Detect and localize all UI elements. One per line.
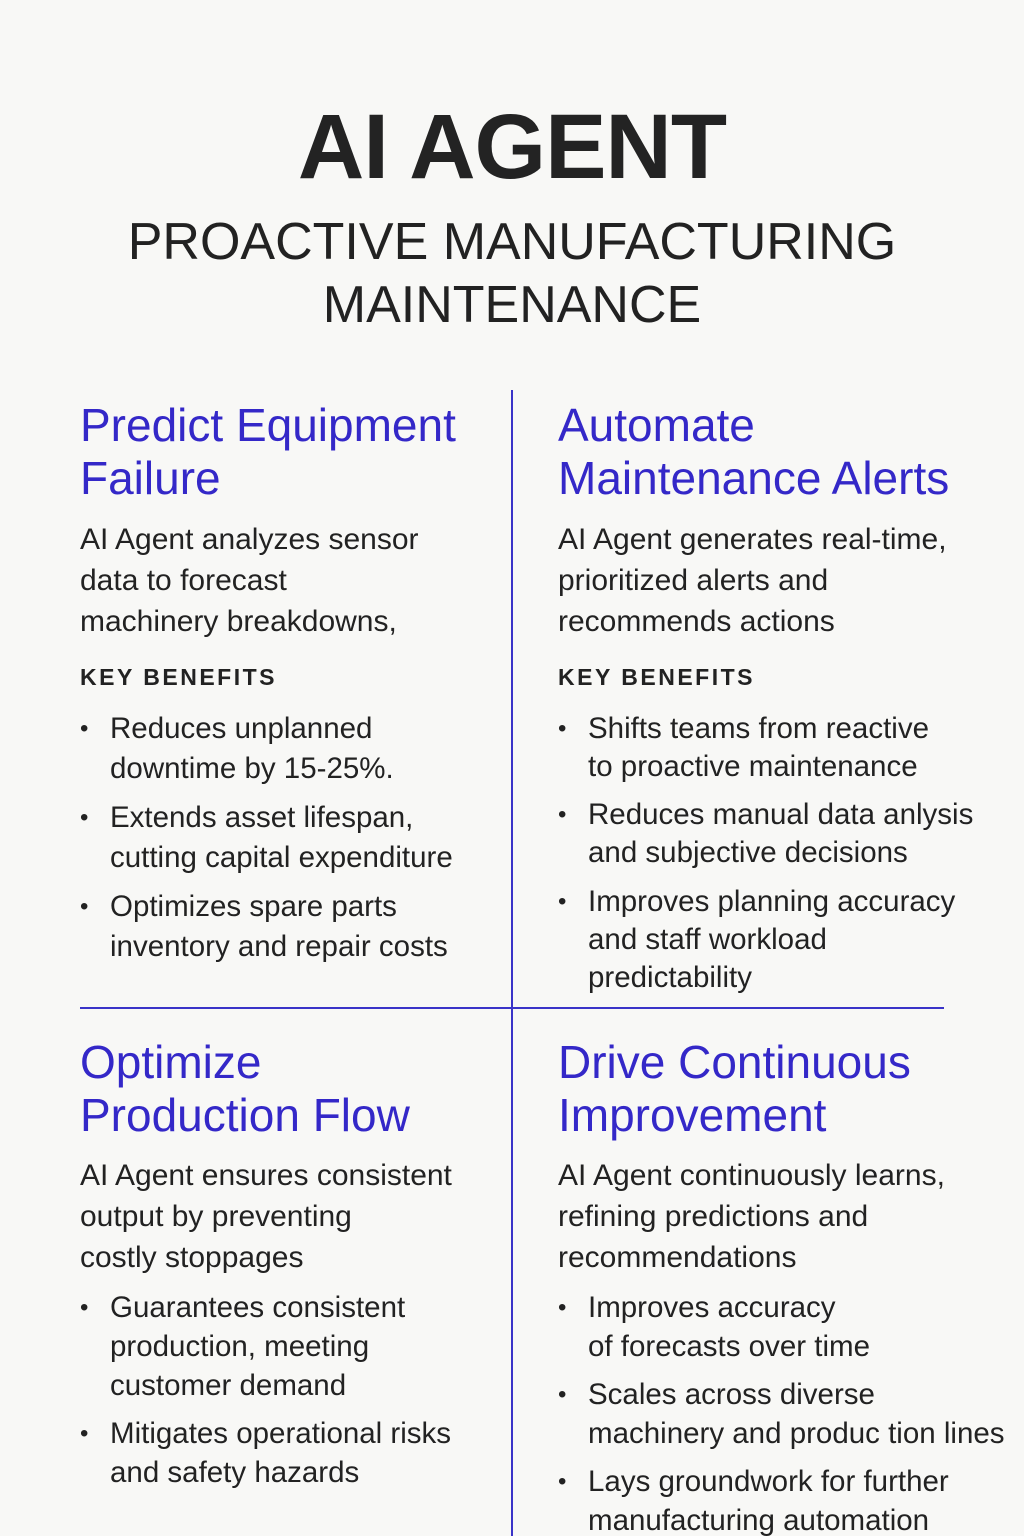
description: refining predictions and <box>558 1200 868 1233</box>
heading: Improvement <box>558 1089 826 1141</box>
heading <box>558 399 949 504</box>
heading <box>80 399 456 504</box>
benefits list <box>558 1291 1005 1536</box>
benefits list: and subjective decisions <box>588 836 908 869</box>
description <box>558 523 947 638</box>
key benefits label: KEY BENEFITS <box>558 664 755 690</box>
description: AI Agent generates real-time, <box>558 523 947 556</box>
title: AI AGENT <box>298 96 726 198</box>
benefits list: and staff workload <box>588 923 827 956</box>
description: AI Agent continuously learns, <box>558 1159 945 1192</box>
heading: Automate <box>558 399 755 451</box>
benefits list: Shifts teams from reactive <box>588 712 929 745</box>
benefits list: Extends asset lifespan, <box>110 801 413 834</box>
heading: Failure <box>80 452 221 504</box>
benefits list: Improves planning accuracy <box>588 885 955 918</box>
description <box>80 523 419 638</box>
subtitle <box>128 213 896 334</box>
panel: predict equipment failure <box>80 399 456 963</box>
benefits list: Guarantees consistent <box>110 1291 405 1324</box>
benefits list: of forecasts over time <box>588 1330 870 1363</box>
heading <box>80 1036 410 1141</box>
heading: Predict Equipment <box>80 399 456 451</box>
benefits list: customer demand <box>110 1369 346 1402</box>
description: output by preventing <box>80 1200 352 1233</box>
benefits list <box>80 712 453 963</box>
benefits list: to proactive maintenance <box>588 750 918 783</box>
benefits list: Improves accuracy <box>588 1291 836 1324</box>
subtitle: PROACTIVE MANUFACTURING <box>128 213 896 271</box>
benefits list: inventory and repair costs <box>110 930 448 963</box>
description: recommends actions <box>558 605 835 638</box>
description: recommendations <box>558 1241 796 1274</box>
description: AI Agent ensures consistent <box>80 1159 452 1192</box>
benefits list: and safety hazards <box>110 1456 359 1489</box>
subtitle: MAINTENANCE <box>323 276 701 334</box>
description: machinery breakdowns, <box>80 605 397 638</box>
heading: Production Flow <box>80 1089 410 1141</box>
benefits list: Scales across diverse <box>588 1378 875 1411</box>
benefits list <box>80 1291 451 1489</box>
description: prioritized alerts and <box>558 564 828 597</box>
benefits list: downtime by 15-25%. <box>110 752 394 785</box>
heading: Drive Continuous <box>558 1036 911 1088</box>
heading <box>558 1036 911 1141</box>
heading: Optimize <box>80 1036 261 1088</box>
benefits list: production, meeting <box>110 1330 369 1363</box>
benefits list: predictability <box>588 961 752 994</box>
benefits list: Optimizes spare parts <box>110 890 397 923</box>
description: AI Agent analyzes sensor <box>80 523 419 556</box>
benefits list <box>558 712 973 994</box>
benefits list: Reduces manual data anlysis <box>588 798 973 831</box>
panel: drive continuous improvement <box>558 1036 1005 1536</box>
benefits list: Mitigates operational risks <box>110 1417 451 1450</box>
description <box>558 1159 945 1274</box>
benefits list: machinery and produc tion lines <box>588 1417 1005 1450</box>
benefits list: Reduces unplanned <box>110 712 372 745</box>
benefits list: Lays groundwork for further <box>588 1465 949 1498</box>
description: costly stoppages <box>80 1241 303 1274</box>
panel: automate maintenance alerts <box>558 399 973 994</box>
description <box>80 1159 452 1274</box>
key benefits label: KEY BENEFITS <box>80 664 277 690</box>
panel: optimize production flow <box>80 1036 452 1489</box>
benefits list: cutting capital expenditure <box>110 841 453 874</box>
description: data to forecast <box>80 564 287 597</box>
heading: Maintenance Alerts <box>558 452 949 504</box>
